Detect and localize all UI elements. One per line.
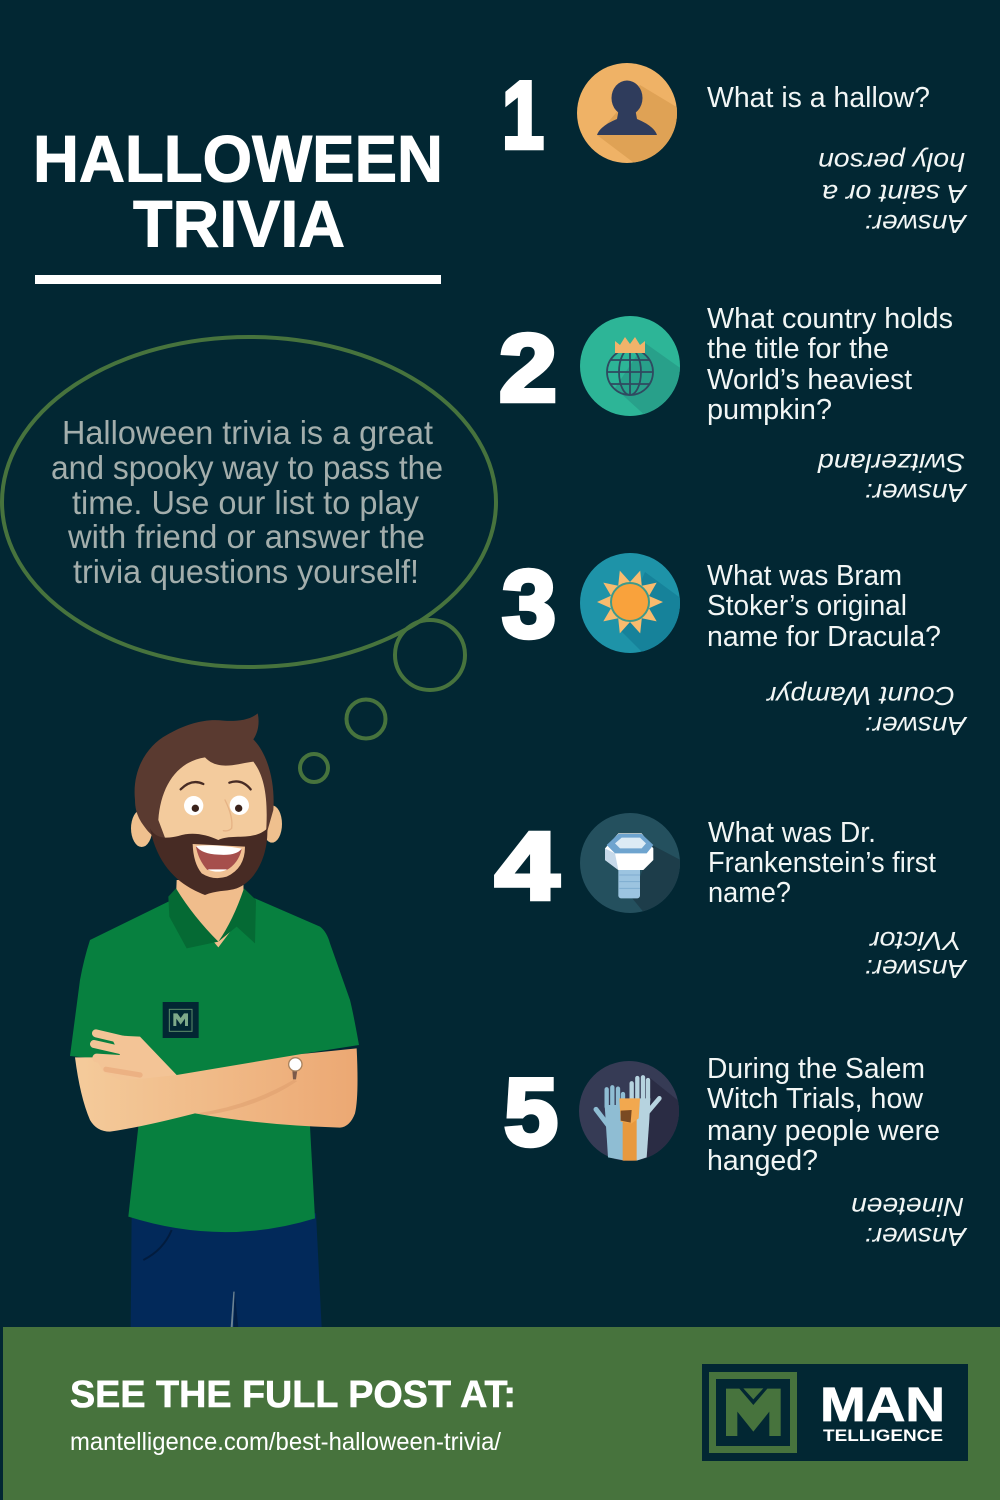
shirt badge xyxy=(163,1002,199,1038)
wrist watch xyxy=(289,1058,302,1079)
bubble text: with friend or answer the xyxy=(67,518,425,555)
bubble text: trivia questions yourself! xyxy=(73,553,419,590)
footer background xyxy=(3,1327,1000,1500)
icon: bolt xyxy=(580,813,680,913)
question 4: name? xyxy=(708,877,791,909)
answer 2: Switzerland xyxy=(816,448,965,478)
trivia item 1 xyxy=(502,62,968,239)
number 1: 1 xyxy=(502,62,544,169)
bubble text: and spooky way to pass the xyxy=(51,449,443,486)
illustrated man xyxy=(70,713,359,1328)
icon: raised hands xyxy=(579,1061,679,1161)
thought bubble xyxy=(2,337,496,782)
question 2: World’s heaviest xyxy=(707,364,912,396)
trivia item 5 xyxy=(504,1053,968,1252)
answer 4: YVictor xyxy=(869,926,962,956)
logo xyxy=(702,1364,968,1461)
question 2: What country holds xyxy=(707,303,953,335)
trivia item 2 xyxy=(499,303,968,508)
number 5: 5 xyxy=(504,1059,558,1166)
answer 1: holy person xyxy=(818,147,965,177)
hair xyxy=(135,713,274,840)
question 2: the title for the xyxy=(707,333,889,365)
answer 5: Answer: xyxy=(865,1222,968,1252)
ears xyxy=(131,805,282,847)
arms xyxy=(75,1033,358,1132)
icon: sun xyxy=(580,553,680,653)
question 4: What was Dr. xyxy=(708,817,876,849)
logo: TELLIGENCE xyxy=(823,1426,943,1445)
footer banner xyxy=(3,1327,1000,1500)
question 1: What is a hallow? xyxy=(707,82,930,114)
number 2: 2 xyxy=(499,315,557,422)
collar xyxy=(168,888,256,948)
answer 4 xyxy=(865,926,968,984)
question 5: Witch Trials, how xyxy=(707,1083,924,1115)
footer url: mantelligence.com/best-halloween-trivia/ xyxy=(70,1428,501,1456)
shirt xyxy=(70,898,359,1232)
neck xyxy=(176,880,244,947)
question 3 xyxy=(707,560,941,653)
answer 3 xyxy=(766,681,968,741)
number 3: 3 xyxy=(502,551,556,658)
question 5: During the Salem xyxy=(707,1053,925,1085)
beard xyxy=(150,828,267,895)
footer heading: SEE THE FULL POST AT: xyxy=(70,1374,516,1416)
eyes xyxy=(184,796,249,815)
logo: MAN xyxy=(820,1379,945,1432)
answer 3: Count Wampyr xyxy=(766,681,955,711)
answer 1: A saint or a xyxy=(822,179,968,209)
question 2: pumpkin? xyxy=(707,394,832,426)
answer 1 xyxy=(818,147,968,239)
icon: globe with crown xyxy=(580,316,680,416)
answer 5 xyxy=(851,1192,968,1252)
question 5 xyxy=(707,1053,940,1177)
answer 1: Answer: xyxy=(865,209,968,239)
answer 2 xyxy=(816,448,968,508)
bubble text: time. Use our list to play xyxy=(72,484,419,521)
title xyxy=(33,122,443,260)
answer 5: Nineteen xyxy=(851,1192,964,1222)
question 5: hanged? xyxy=(707,1145,818,1177)
face xyxy=(158,757,267,860)
bubble text: Halloween trivia is a great xyxy=(62,414,433,451)
question 4 xyxy=(708,817,936,909)
mouth xyxy=(193,844,245,878)
title: TRIVIA xyxy=(133,186,345,260)
trivia item 3 xyxy=(502,551,968,741)
number 4: 4 xyxy=(495,813,559,920)
question 3: name for Dracula? xyxy=(707,621,941,653)
icon: person xyxy=(577,63,677,163)
answer 2: Answer: xyxy=(865,478,968,508)
trivia item 4 xyxy=(495,813,968,984)
title underline xyxy=(35,275,441,284)
body xyxy=(70,898,359,1328)
question 4: Frankenstein’s first xyxy=(708,847,936,879)
bubble text xyxy=(51,414,443,590)
question 5: many people were xyxy=(707,1115,940,1147)
bubble outline xyxy=(2,337,496,782)
answer 4: Answer: xyxy=(865,954,968,984)
head xyxy=(131,713,282,948)
trousers xyxy=(131,1213,322,1328)
answer 3: Answer: xyxy=(865,711,968,741)
title: HALLOWEEN xyxy=(33,122,443,196)
question 3: Stoker’s original xyxy=(707,590,907,622)
question 2 xyxy=(707,303,953,426)
eyebrows and nose xyxy=(181,781,251,831)
question 3: What was Bram xyxy=(707,560,902,592)
